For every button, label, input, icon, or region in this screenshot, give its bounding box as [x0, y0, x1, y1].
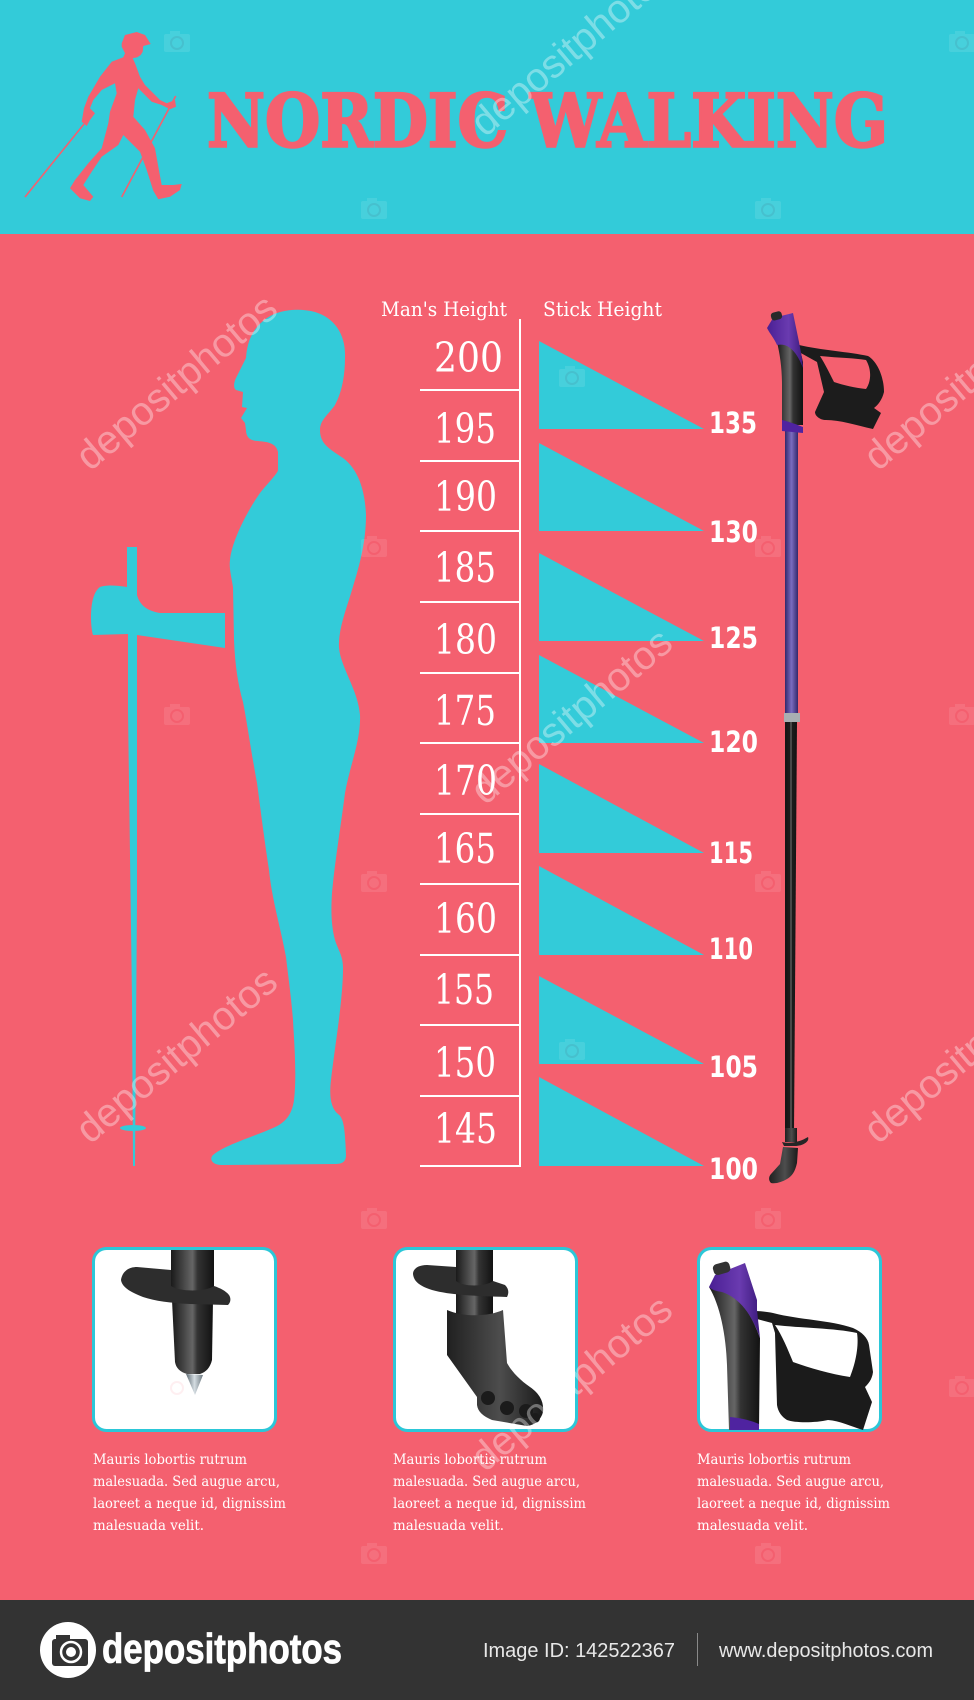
card 2 text — [393, 1452, 586, 1534]
icon: nordic walker silhouette — [25, 32, 182, 201]
stick height values: 125 — [709, 621, 758, 655]
height scale: 160 — [434, 895, 497, 943]
lower black shaft — [785, 722, 797, 1132]
lower fitting and foot — [785, 1128, 797, 1142]
purple cap — [767, 313, 803, 368]
card 1 text — [93, 1452, 286, 1534]
grip — [709, 1287, 760, 1430]
column heading: man's height: Man's Height — [381, 297, 507, 321]
height scale: 150 — [434, 1039, 496, 1087]
silver ferrule — [784, 713, 800, 722]
strap opening — [820, 356, 870, 389]
card 1 text: Mauris lobortis rutrum — [93, 1452, 247, 1468]
footer logo wordmark: depositphotos — [102, 1625, 342, 1672]
shaft — [171, 1250, 214, 1295]
card 3 text — [697, 1452, 890, 1534]
stick height values: 105 — [709, 1050, 758, 1084]
stick height values: 110 — [709, 932, 753, 966]
height scale — [420, 319, 520, 1167]
stick height values: 115 — [709, 836, 753, 870]
card 2 text: malesuada velit. — [393, 1518, 504, 1534]
card 3 text: laoreet a neque id, dignissim — [697, 1496, 890, 1512]
watermarks: depositphotos — [68, 286, 286, 479]
height scale: 195 — [434, 405, 496, 453]
card 2 text: malesuada. Sed augue arcu, — [393, 1474, 580, 1490]
stick height triangles — [539, 341, 704, 1166]
watermarks: depositphotos — [68, 959, 286, 1152]
card 2 text: laoreet a neque id, dignissim — [393, 1496, 586, 1512]
tip body — [172, 1300, 213, 1374]
nordic walking pole — [767, 311, 884, 1183]
icon: footer logo camera — [40, 1622, 96, 1678]
height scale: 155 — [434, 966, 494, 1014]
header band — [0, 0, 974, 234]
stick height values: 120 — [709, 725, 758, 759]
pole basket — [120, 1125, 146, 1131]
basket — [121, 1267, 230, 1305]
footer bar — [0, 1600, 974, 1700]
height scale: 180 — [434, 616, 497, 664]
basket — [413, 1265, 508, 1297]
grip — [777, 332, 803, 425]
footer image id: Image ID: 142522367 — [483, 1640, 675, 1662]
watermarks: depositphotos — [463, 620, 681, 813]
strap — [799, 345, 884, 429]
height scale: 185 — [434, 544, 496, 592]
card 1: spike tip — [94, 1248, 276, 1430]
height scale: 145 — [434, 1105, 497, 1153]
card 3 text: Mauris lobortis rutrum — [697, 1452, 851, 1468]
purple collar — [730, 1417, 759, 1430]
height scale: 175 — [434, 687, 496, 735]
card 3 text: malesuada. Sed augue arcu, — [697, 1474, 884, 1490]
height scale: 170 — [434, 757, 497, 805]
cap knob — [770, 311, 783, 321]
card 1 text: malesuada. Sed augue arcu, — [93, 1474, 280, 1490]
shaft — [456, 1250, 493, 1320]
height scale: 200 — [434, 334, 503, 382]
column heading: stick height: Stick Height — [543, 297, 662, 321]
height scale: 190 — [434, 473, 497, 521]
foot body — [447, 1310, 543, 1426]
footer website: www.depositphotos.com — [718, 1640, 933, 1662]
title: NORDIC WALKING — [207, 79, 888, 165]
card 2 text: Mauris lobortis rutrum — [393, 1452, 547, 1468]
stick height values: 135 — [709, 406, 757, 440]
purple collar — [782, 420, 803, 433]
cap knob — [712, 1261, 731, 1276]
man's body — [211, 310, 366, 1165]
strap — [753, 1311, 873, 1430]
upper purple shaft — [785, 430, 798, 714]
stick height values — [709, 406, 758, 1186]
card 1 text: laoreet a neque id, dignissim — [93, 1496, 286, 1512]
card 1 text: malesuada velit. — [93, 1518, 204, 1534]
purple cap — [709, 1263, 760, 1338]
spike — [186, 1374, 203, 1395]
man silhouette with pole — [91, 310, 366, 1166]
card 3: handle and strap — [698, 1248, 880, 1430]
stick height values: 100 — [709, 1152, 758, 1186]
stick height values: 130 — [709, 515, 758, 549]
card 3 text: malesuada velit. — [697, 1518, 808, 1534]
card 2: rubber foot tip — [394, 1248, 576, 1430]
strap opening — [775, 1325, 858, 1377]
height scale: 165 — [434, 825, 496, 873]
foot nubs — [481, 1391, 540, 1423]
watermarks: depositphotos — [463, 1287, 681, 1480]
arm and pole — [91, 547, 225, 1166]
